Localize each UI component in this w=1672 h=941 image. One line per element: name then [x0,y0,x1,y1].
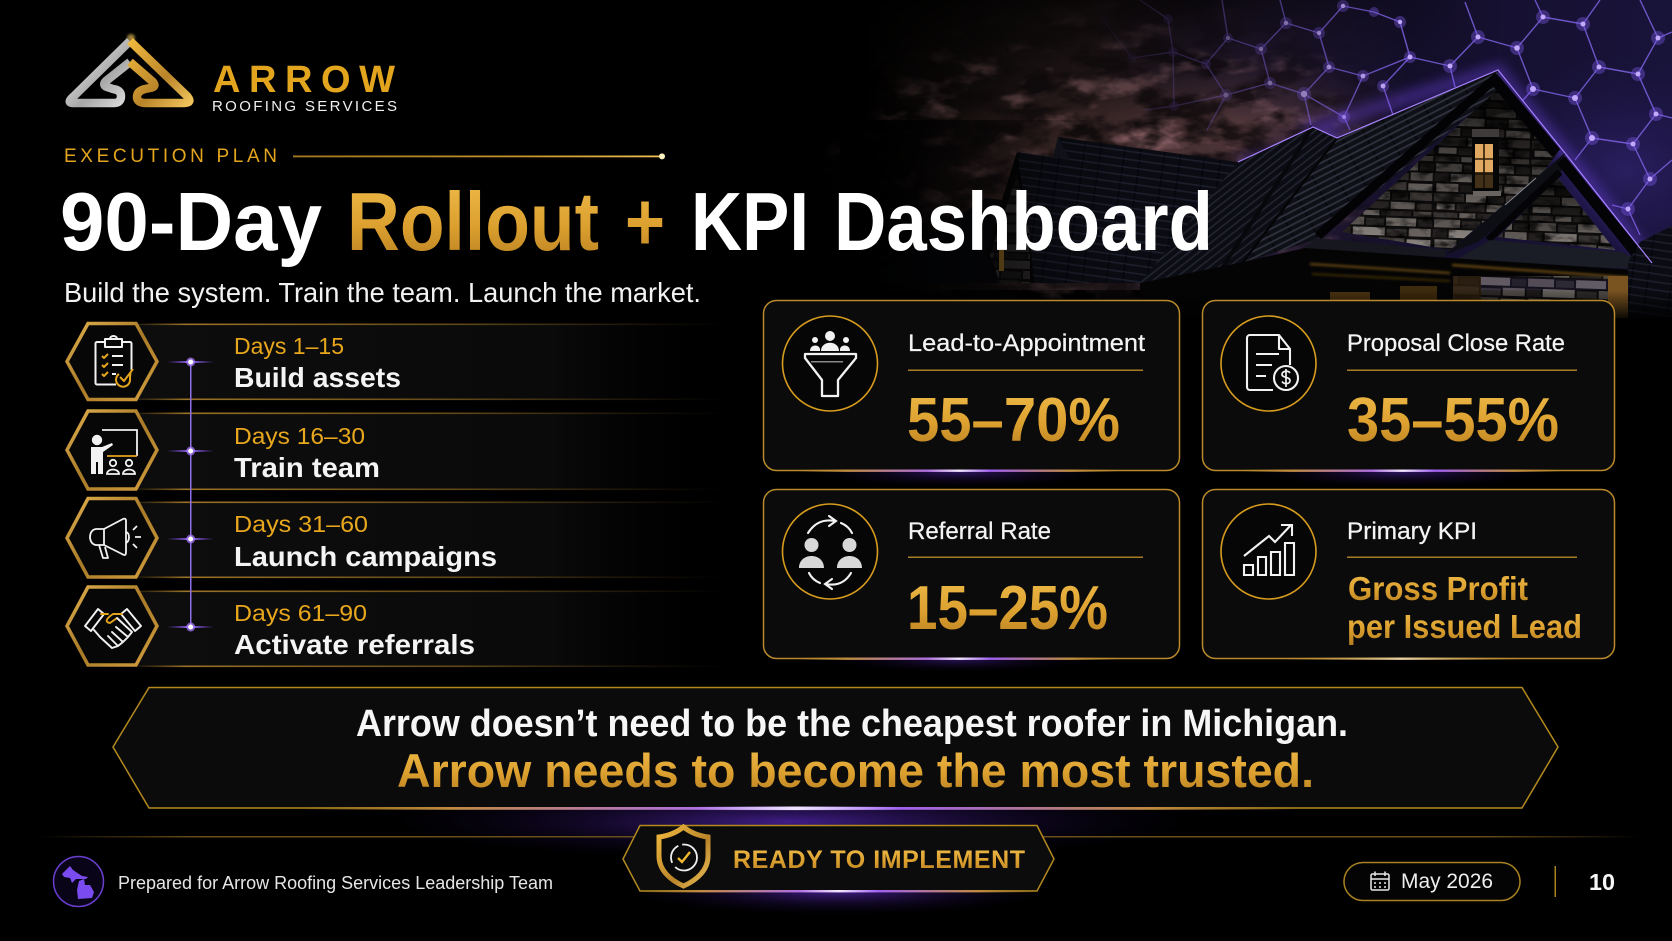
title [60,175,1213,268]
label: Proposal Close Rate [1347,330,1565,357]
row: days 1-15 [67,324,728,400]
banner line 2: Arrow needs to become the most trusted. [397,744,1314,797]
label: Primary KPI [1347,518,1477,545]
background: hexagon network [1099,0,1672,235]
prepared-for text: Prepared for Arrow Roofing Services Leadership Team [118,873,553,893]
value: 55–70% [907,386,1120,455]
panel: primary KPI [1202,490,1614,660]
icon: megaphone [67,498,157,577]
logo mark: silver and gold roof arrow [70,34,189,103]
label: Lead-to-Appointment [908,330,1145,357]
label: activate referrals: Activate referrals [234,629,475,660]
badge text: READY TO IMPLEMENT [733,846,1025,874]
title: 90-Day [60,175,322,268]
callout glow [390,784,1190,860]
icon: document with dollar [1221,316,1316,411]
value: Gross Profit [1348,570,1528,607]
icon: growth chart [1221,504,1316,599]
timeline: 90-day rollout phases [67,324,728,667]
value [1347,570,1582,645]
label: build assets: Build assets [234,362,401,393]
value: 35–55% [1347,386,1559,455]
banner line 1: Arrow doesn’t need to be the cheapest roofer in Michigan. [356,703,1348,745]
logo: Arrow Roofing Services [70,34,397,115]
icon: calendar [1371,872,1389,890]
label: train team: Train team [234,452,380,483]
page number: 10 [1589,869,1615,895]
value: per Issued Lead [1347,608,1582,645]
callout banner [113,688,1558,810]
value: 15–25% [907,574,1108,643]
subtitle: Build the system. Train the team. Launch the market. [64,277,701,308]
page number [1554,866,1615,897]
label: days 31-60: Days 31–60 [234,511,368,537]
panel: lead-to-appointment KPI [764,300,1180,487]
icon: shield check [659,827,708,886]
panel: referral rate KPI [764,490,1180,672]
badge: ready to implement [623,826,1054,915]
title: Dashboard [834,175,1213,268]
title: Rollout [347,175,599,268]
panel: proposal close rate KPI [1202,300,1614,487]
label: launch campaigns: Launch campaigns [234,541,497,572]
footer: prepared for [54,856,553,906]
row: days 31-60 [67,498,728,578]
illustration: house at night [840,70,1672,322]
footer: date pill [1344,862,1520,900]
label: Referral Rate [908,518,1051,545]
title: + [625,175,665,268]
footer divider [40,836,1640,838]
eyebrow: execution plan [64,146,665,167]
row: days 16-30 [67,411,728,490]
timeline connector with nodes [167,358,214,632]
label: days 1-15: Days 1–15 [234,333,344,359]
icon: trainer at whiteboard [67,411,157,489]
date text: May 2026 [1401,870,1493,893]
label: days 16-30: Days 16–30 [234,423,365,449]
icon: people funnel [782,316,878,411]
icon: Michigan map [54,856,104,906]
icon: referral loop [782,504,878,599]
row: days 61-90 [67,587,728,667]
icon: clipboard checklist [67,324,157,400]
icon: handshake [67,587,157,665]
logo wordmark: ARROW [213,59,395,101]
title: KPI [691,175,809,268]
label: days 61-90: Days 61–90 [234,600,367,626]
logo tagline: ROOFING SERVICES [212,98,397,115]
background: night sky with clouds [780,0,1672,300]
eyebrow: execution plan: EXECUTION PLAN [64,146,277,167]
